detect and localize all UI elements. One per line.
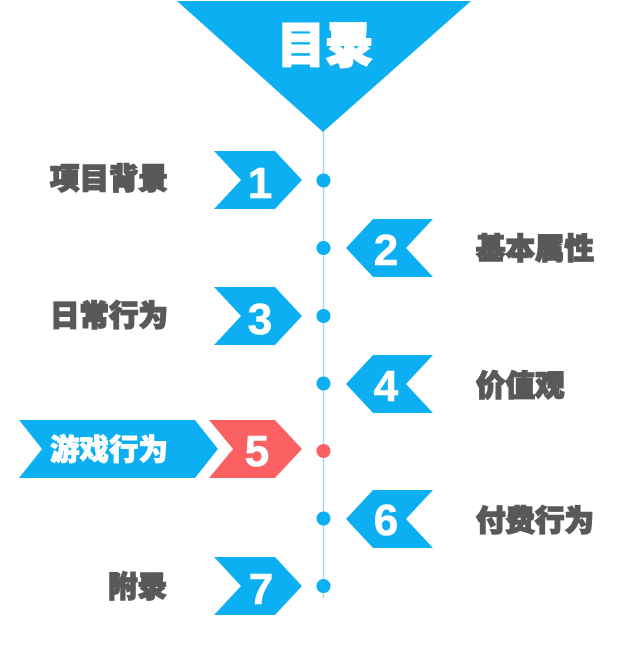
item 7: 附录: 附录	[108, 564, 167, 606]
item 3: 日常行为: 日常行为	[50, 293, 168, 335]
item 5: 游戏行为 (highlighted)	[19, 420, 330, 478]
item 6: 付费行为: 付费行为	[476, 498, 594, 540]
item 3: 日常行为	[50, 287, 330, 345]
title banner: 目录	[277, 6, 373, 76]
title banner	[177, 1, 471, 132]
item 2: 基本属性	[316, 219, 594, 277]
item 7: 附录	[108, 557, 330, 615]
item 7: 附录: 7	[249, 565, 273, 614]
item 1: 项目背景	[50, 151, 330, 209]
item 4: 价值观: 4	[374, 362, 399, 411]
item 1: 项目背景: 项目背景	[50, 156, 168, 198]
item 1: 项目背景: 1	[248, 159, 272, 208]
item 5: 游戏行为 (highlighted): 游戏行为	[50, 427, 168, 469]
item 2: 基本属性: 基本属性	[476, 226, 594, 268]
item 4: 价值观	[316, 355, 565, 413]
item 3: 日常行为: 3	[248, 295, 272, 344]
timeline vertical line	[322, 130, 324, 598]
item 4: 价值观: 价值观	[476, 363, 565, 405]
item 5: 游戏行为 (highlighted): 5	[245, 427, 269, 476]
item 6: 付费行为	[316, 490, 594, 548]
item 6: 付费行为: 6	[374, 496, 398, 545]
item 2: 基本属性: 2	[374, 226, 398, 275]
